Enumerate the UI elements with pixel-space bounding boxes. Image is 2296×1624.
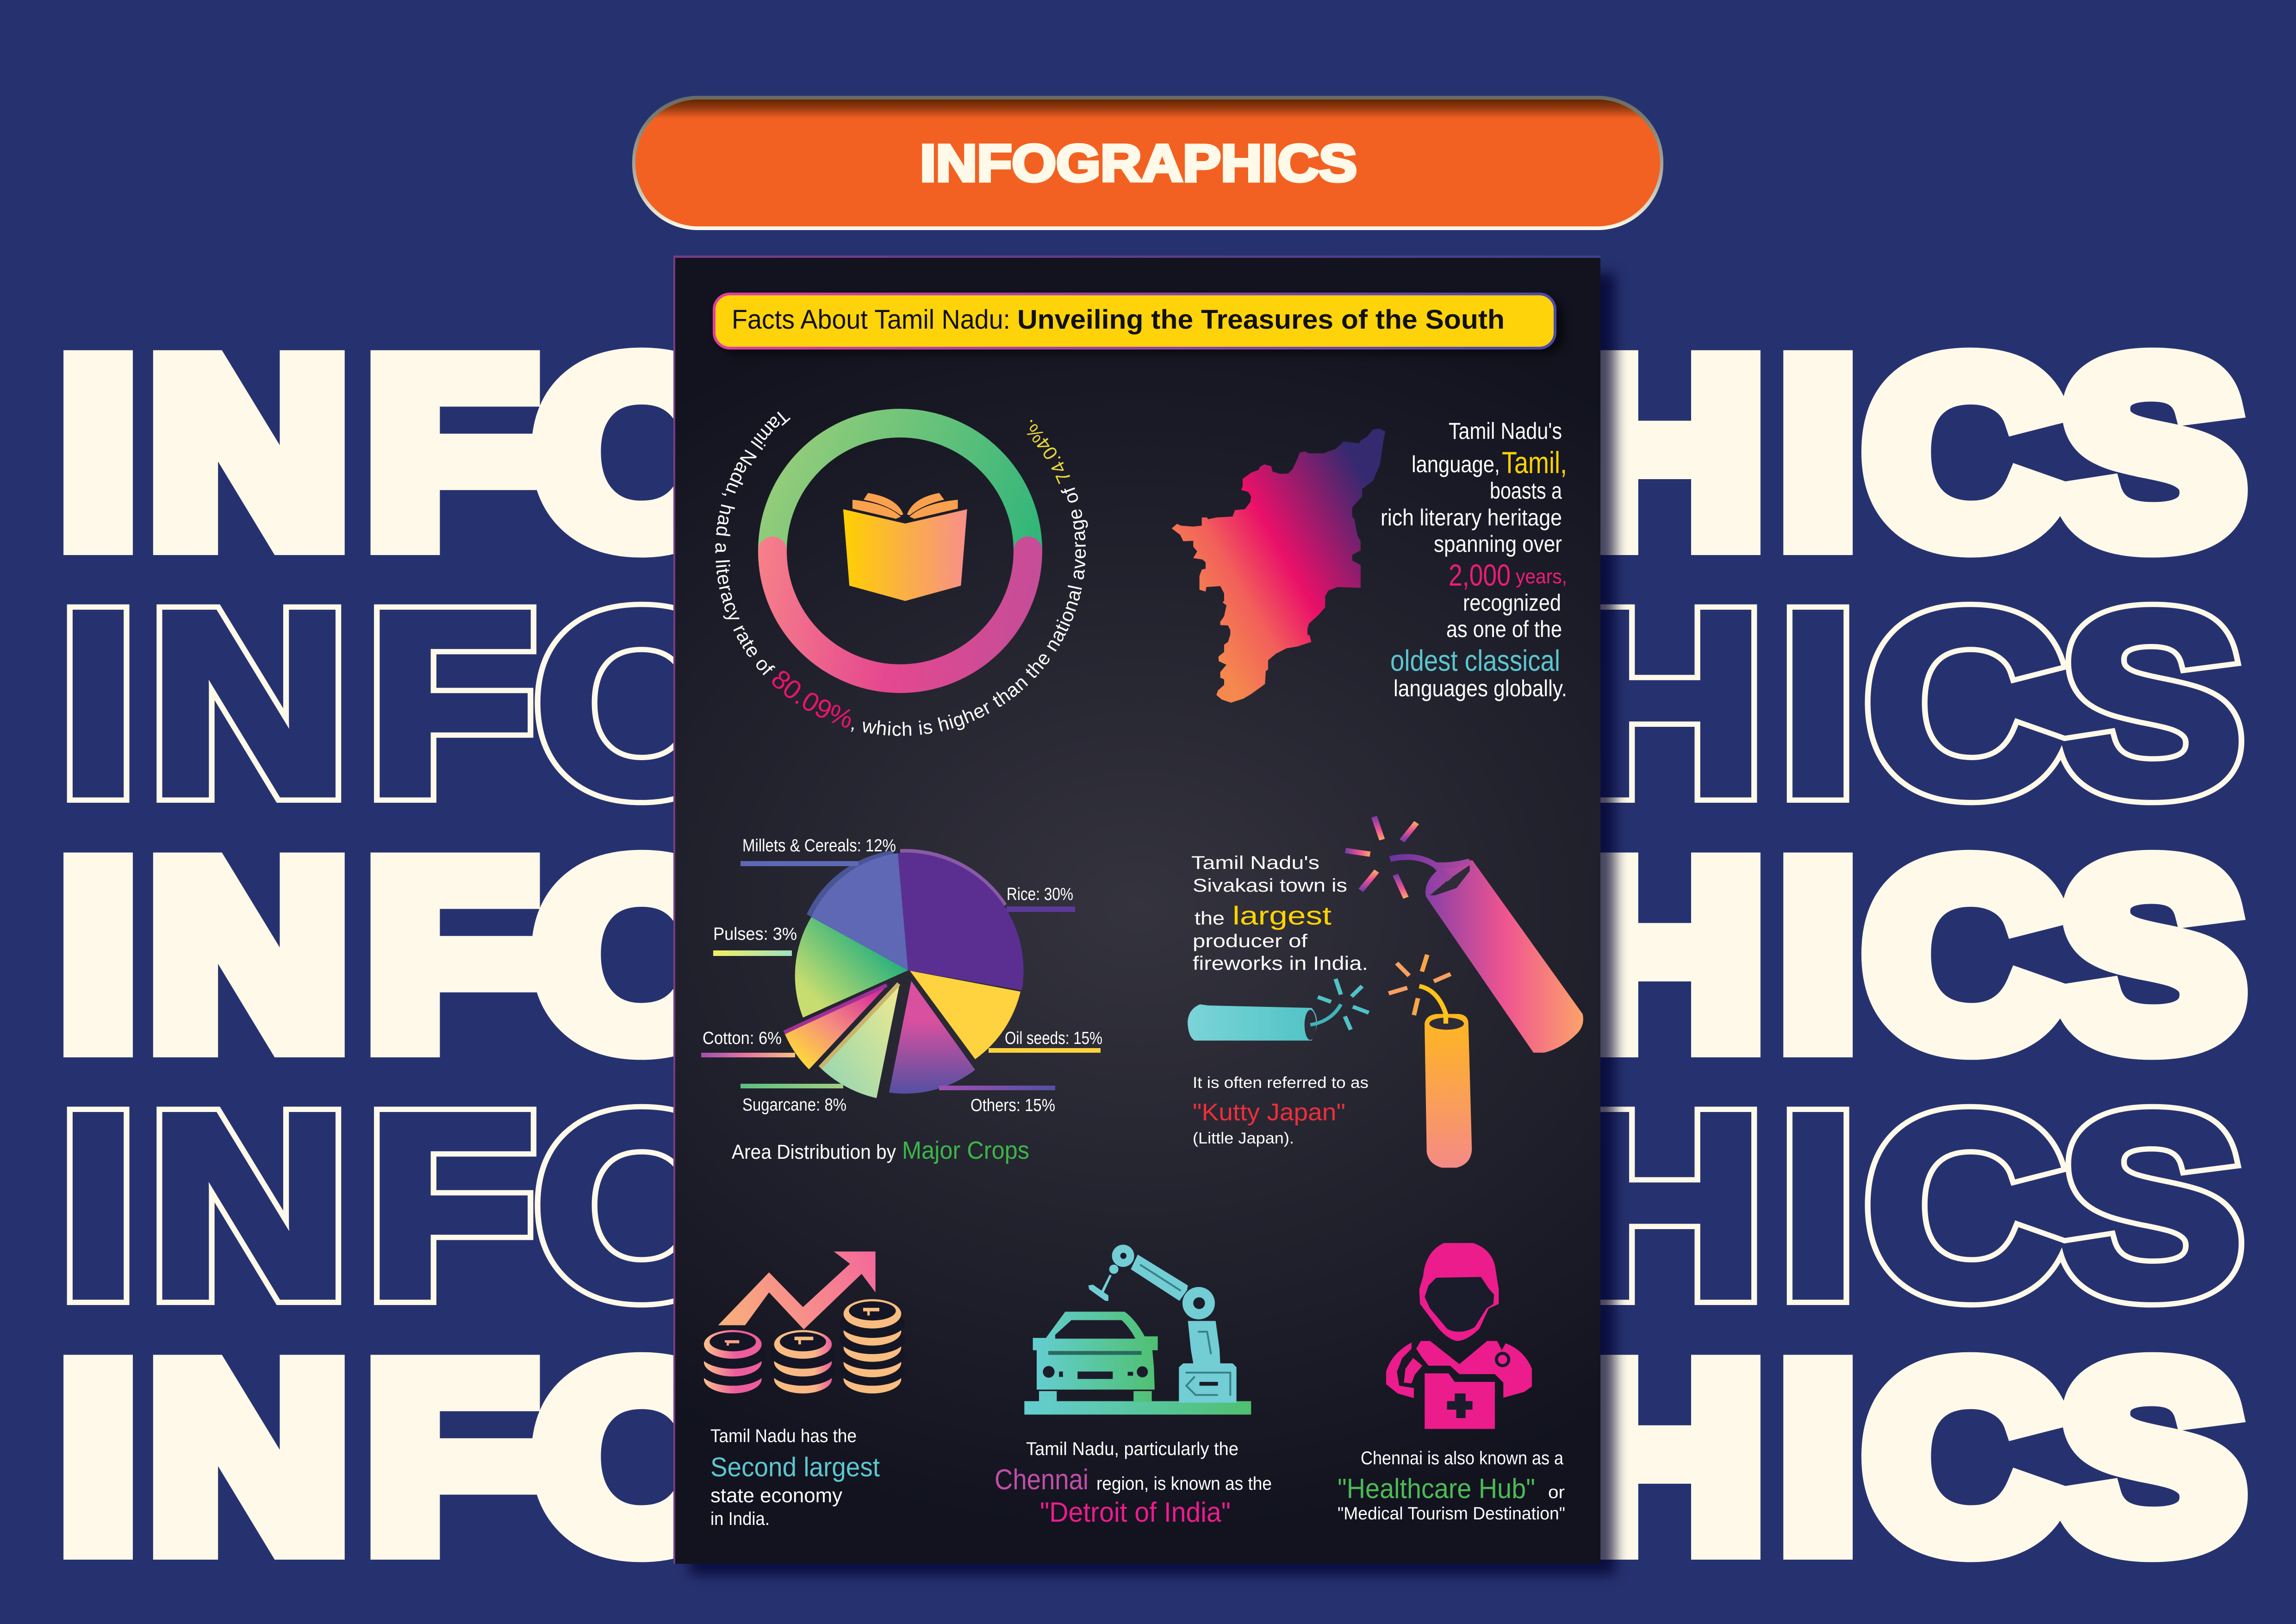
- fireworks text: the: [1195, 908, 1225, 929]
- icon: large firecracker: [1345, 817, 1583, 1053]
- label: sugarcane: [740, 1084, 846, 1115]
- background word row 2, outlined: INFOGRAPHICS: [60, 560, 2244, 847]
- automobile text: [995, 1439, 1272, 1528]
- icon: robot arm and car: [1024, 1245, 1251, 1415]
- background word row 4, outlined: INFOGRAPHICS: [60, 1062, 2244, 1349]
- fireworks text: (Little Japan).: [1193, 1130, 1294, 1147]
- language text block: Tamil,: [1502, 445, 1567, 480]
- ring: pink arc: [772, 551, 1028, 679]
- heading bar: [714, 294, 1563, 354]
- language text block: years,: [1516, 565, 1567, 588]
- icon: open book: [843, 493, 967, 601]
- label: pulses: [713, 924, 797, 956]
- chart caption: Area Distribution by: [732, 1141, 896, 1163]
- language text block: as one of the: [1446, 616, 1562, 642]
- slice: others: [889, 981, 975, 1093]
- language text block: language,: [1412, 451, 1500, 477]
- label: millets and cereals: Millets & Cereals: 12%: [742, 836, 896, 856]
- economy text: Second largest: [710, 1452, 880, 1482]
- slice: rice: [898, 853, 1024, 990]
- icon: robot arm: [1089, 1245, 1237, 1403]
- background word row 4, outlined: INFOGRAPHICS: [60, 1062, 2244, 1349]
- poster panel: [673, 256, 1600, 1564]
- label: millets and cereals: [740, 836, 896, 866]
- fireworks text: fireworks in India.: [1193, 952, 1368, 974]
- label: pulses: Pulses: 3%: [713, 924, 797, 944]
- healthcare text: "Medical Tourism Destination": [1338, 1504, 1565, 1524]
- heading text: Unveiling the Treasures of the South: [1017, 305, 1505, 335]
- fireworks text: Tamil Nadu's: [1191, 853, 1319, 873]
- background word row 1, filled: INFOGRAPHICS: [60, 309, 2244, 596]
- icon: car: [1033, 1312, 1158, 1402]
- background word row 3, filled: INFOGRAPHICS: [60, 811, 2244, 1099]
- fireworks text: [1191, 853, 1369, 1147]
- economy text: [710, 1426, 880, 1529]
- language text block: rich literary heritage: [1381, 505, 1562, 531]
- language text block: Tamil Nadu's: [1449, 418, 1562, 444]
- pill title text: INFOGRAPHICS: [920, 134, 1357, 192]
- fireworks text: producer of: [1193, 931, 1308, 951]
- icon: left arm and stethoscope: [1386, 1343, 1414, 1398]
- economy text: Tamil Nadu has the: [710, 1426, 857, 1446]
- heading text: Facts About Tamil Nadu:: [732, 305, 1010, 335]
- healthcare text: [1338, 1448, 1565, 1524]
- economy text: state economy: [710, 1484, 842, 1507]
- label: cotton: Cotton: 6%: [703, 1029, 782, 1048]
- slice: cotton: [785, 985, 888, 1069]
- healthcare text: or: [1548, 1483, 1565, 1502]
- icon: doctor with medical folder: [1386, 1243, 1532, 1429]
- label: others: Others: 15%: [971, 1096, 1055, 1115]
- pie back rim: [807, 850, 903, 968]
- economy text: in India.: [710, 1509, 770, 1529]
- label: others: [939, 1086, 1055, 1115]
- literacy ring: Tamil Nadu, had a literacy rate of 80.09%, which is higher than the national average of 74.04%.: [711, 405, 1090, 740]
- panel shadow: [690, 273, 1615, 1575]
- icon: shoulders: [1416, 1341, 1532, 1398]
- icon: arrow: [718, 1251, 876, 1330]
- fireworks text: "Kutty Japan": [1193, 1099, 1345, 1126]
- language text block: [1381, 418, 1567, 701]
- fireworks text: It is often referred to as: [1193, 1074, 1369, 1092]
- icon: firecrackers: [1188, 817, 1583, 1168]
- label: oil seeds: Oil seeds: 15%: [1005, 1029, 1102, 1048]
- healthcare text: Chennai is also known as a: [1361, 1448, 1564, 1468]
- label: oil seeds: [989, 1029, 1102, 1053]
- label: rice: Rice: 30%: [1007, 885, 1073, 904]
- icon: coin stacks: [700, 1299, 905, 1393]
- icon: conveyor base: [1024, 1401, 1251, 1415]
- ring: green arc: [772, 423, 1028, 551]
- fireworks text: Sivakasi town is: [1193, 875, 1347, 896]
- slice: pulses: [795, 917, 908, 1018]
- map of Tamil Nadu: [1172, 429, 1385, 703]
- automobile text: Tamil Nadu, particularly the: [1026, 1439, 1238, 1459]
- label: cotton: [701, 1029, 795, 1057]
- language text block: recognized: [1463, 590, 1561, 616]
- language text block: spanning over: [1434, 531, 1562, 557]
- language text block: languages globally.: [1394, 675, 1567, 701]
- icon: orange firecracker: [1389, 955, 1472, 1168]
- background word row 5, filled: INFOGRAPHICS: [60, 1313, 2244, 1601]
- chart caption: Major Crops: [902, 1137, 1029, 1164]
- language text block: 2,000: [1449, 558, 1511, 592]
- chart caption: [732, 1137, 1029, 1164]
- label: rice: [1007, 885, 1075, 912]
- icon: rising arrow over coin stacks: [700, 1251, 905, 1393]
- slice: oil seeds: [910, 971, 1020, 1059]
- background word row 2, outlined: INFOGRAPHICS: [60, 560, 2244, 847]
- automobile text: "Detroit of India": [1040, 1497, 1231, 1528]
- healthcare text: "Healthcare Hub": [1338, 1473, 1535, 1504]
- fireworks text: largest: [1232, 901, 1332, 930]
- language text block: oldest classical: [1390, 644, 1560, 677]
- icon: teal firecracker: [1188, 979, 1369, 1041]
- automobile text: region, is known as the: [1096, 1474, 1272, 1494]
- icon: folder: [1425, 1374, 1495, 1429]
- title pill: [632, 96, 1663, 230]
- automobile text: Chennai: [995, 1464, 1089, 1496]
- circular caption: [716, 408, 1086, 736]
- icon: head: [1419, 1243, 1499, 1341]
- slice: sugarcane: [821, 984, 900, 1098]
- slice: millets and cereals: [811, 853, 908, 970]
- pie chart: area distribution by major crops: [701, 836, 1102, 1164]
- label: sugarcane: Sugarcane: 8%: [742, 1095, 846, 1115]
- language text block: boasts a: [1490, 478, 1562, 504]
